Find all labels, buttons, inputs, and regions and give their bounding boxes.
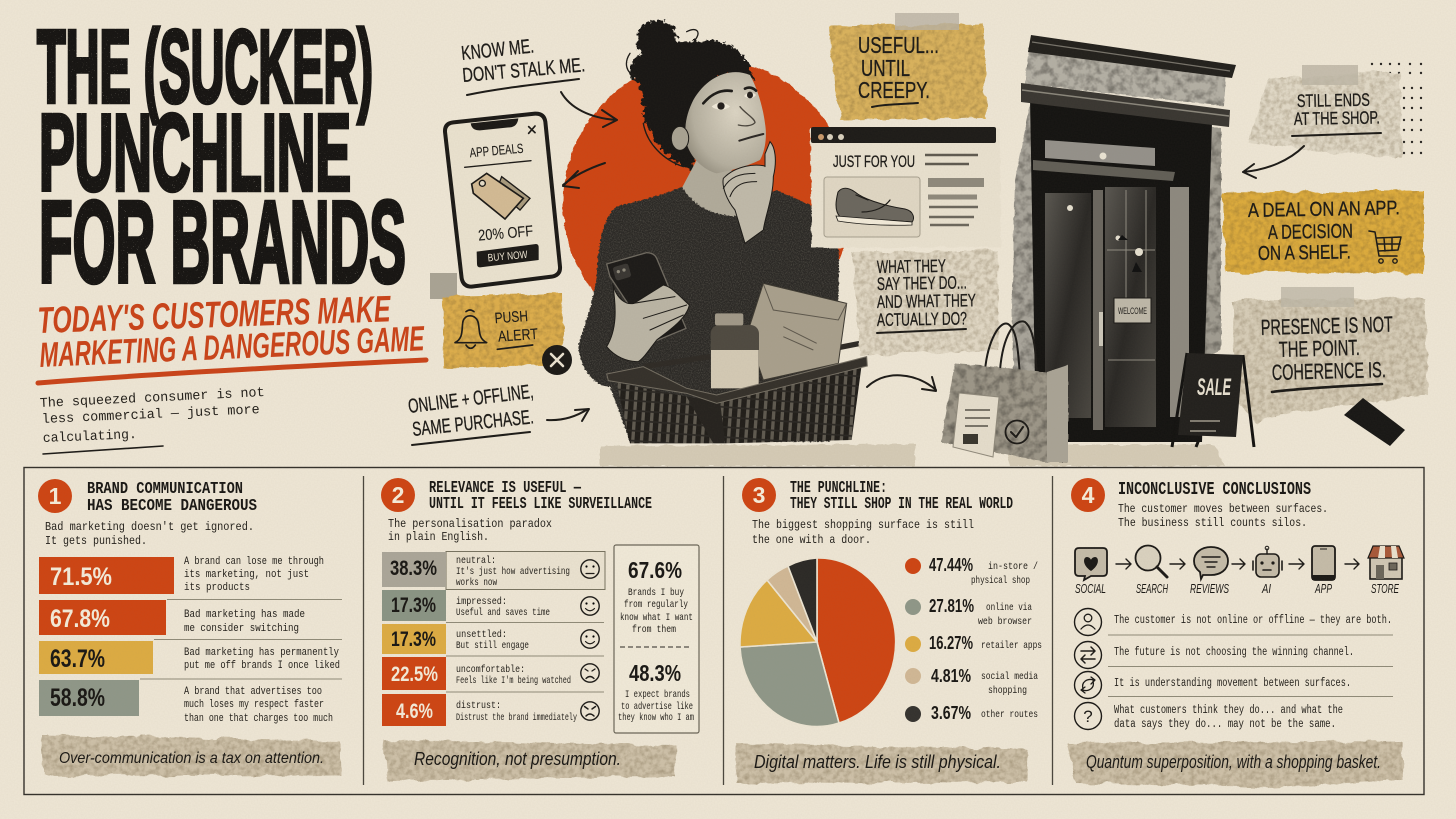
panel 3: the punchline xyxy=(735,478,1042,783)
legend retailer apps xyxy=(905,633,1042,653)
arrow to store xyxy=(1243,146,1304,178)
statement: movement xyxy=(1074,672,1351,698)
note: useful until creepy xyxy=(830,13,986,120)
browser window just for you: JUST FOR YOU xyxy=(833,152,915,171)
note: a deal on an app: A DEAL ON AN APP. xyxy=(1248,197,1400,222)
heading 2 xyxy=(429,479,652,514)
legend other: 3.67% xyxy=(931,703,971,723)
bar 63.7: 63.7% xyxy=(50,645,105,673)
icon: ai robot: AI xyxy=(1261,581,1271,596)
row neutral: works now xyxy=(456,577,497,589)
heading 3 xyxy=(790,479,1013,514)
badge 3 xyxy=(742,478,776,512)
intro 3: the one with a door. xyxy=(752,533,871,547)
statement: future: The future is not choosing the winning channel. xyxy=(1114,646,1354,659)
icon: store xyxy=(1368,546,1404,596)
note: useful until creepy: UNTIL xyxy=(861,55,910,81)
text: FOR BRANDS xyxy=(39,177,406,307)
row unsettled: unsettled: xyxy=(456,629,507,641)
note: online + offline xyxy=(407,381,535,445)
statement: online or offline xyxy=(1074,608,1392,636)
intro 2 xyxy=(388,517,552,544)
statement: what customers think: ? xyxy=(1083,707,1093,726)
row neutral: It's just how advertising xyxy=(456,566,570,578)
stat box: from them xyxy=(632,624,676,636)
legend retailer apps: 16.27% xyxy=(929,633,973,653)
note: push alert: ALERT xyxy=(497,326,539,346)
legend social: 4.81% xyxy=(931,666,971,686)
subtitle: TODAY'S CUSTOMERS MAKE xyxy=(37,288,392,341)
subtitle: MARKETING A DANGEROUS GAME xyxy=(39,319,426,375)
arrow to bag xyxy=(867,375,936,391)
intro text: calculating. xyxy=(43,428,137,447)
arrow xyxy=(1289,559,1304,569)
stat box: from regularly xyxy=(624,599,688,611)
icon: reviews xyxy=(1190,547,1229,596)
row distrust: Distrust the brand immediately xyxy=(456,712,577,724)
icon: social xyxy=(1075,548,1107,596)
badge 4: 4 xyxy=(1082,482,1095,508)
sale sign: SALE xyxy=(1197,374,1232,401)
note: what they say: WHAT THEY xyxy=(877,256,946,277)
note: a deal on an app: ON A SHELF. xyxy=(1258,241,1351,265)
intro 3: The biggest shopping surface is still xyxy=(752,518,974,532)
note: online + offline: SAME PURCHASE. xyxy=(411,406,535,441)
row distrust: distrust: xyxy=(456,700,501,712)
note: useful until creepy: USEFUL... xyxy=(858,32,939,58)
legend online xyxy=(905,596,1032,628)
stat box: I expect brands xyxy=(625,689,690,701)
row neutral: 38.3% xyxy=(390,557,437,580)
icon: search: SEARCH xyxy=(1136,581,1168,596)
bar 71.5: A brand can lose me through xyxy=(184,556,324,568)
heading 1: HAS BECOME DANGEROUS xyxy=(87,497,257,516)
row uncomfortable: uncomfortable: xyxy=(456,664,525,676)
shopping bag xyxy=(941,321,1068,462)
bar 58.8: 58.8% xyxy=(50,684,105,712)
legend in-store: in-store / xyxy=(988,561,1038,573)
row uncomfortable: 22.5% xyxy=(391,663,438,686)
intro 1: It gets punished. xyxy=(45,534,147,548)
intro 1: Bad marketing doesn't get ignored. xyxy=(45,520,254,534)
strip 3: Digital matters. Life is still physical. xyxy=(754,752,1001,772)
intro text xyxy=(40,386,265,454)
note: a deal on an app: A DECISION xyxy=(1268,221,1353,244)
strip 3 xyxy=(735,744,1028,783)
panel 4: inconclusive conclusions xyxy=(1067,478,1404,787)
arrow xyxy=(1170,559,1185,569)
icon: app phone xyxy=(1312,546,1335,596)
icon: social: SOCIAL xyxy=(1075,581,1106,596)
bar 58.8 xyxy=(39,680,333,725)
row distrust xyxy=(382,694,599,726)
bar 63.7: Bad marketing has permanently xyxy=(184,647,339,659)
icon: reviews: REVIEWS xyxy=(1190,581,1229,596)
statement: movement: It is understanding movement between surfaces. xyxy=(1114,677,1351,690)
statement: what customers think xyxy=(1074,702,1343,731)
intro text: The squeezed consumer is not xyxy=(40,386,265,412)
note: a deal on an app xyxy=(1222,190,1424,274)
heading 2: UNTIL IT FEELS LIKE SURVEILLANCE xyxy=(429,495,652,514)
strip 2 xyxy=(384,740,676,781)
badge 2: 2 xyxy=(392,482,404,508)
intro text: less commercial — just more xyxy=(42,403,260,428)
heading 1 xyxy=(87,480,257,516)
dismiss button xyxy=(542,345,572,375)
storefront xyxy=(1005,35,1236,466)
storefront: WELCOME xyxy=(1118,306,1147,316)
phone app deals xyxy=(445,114,560,287)
legend in-store xyxy=(905,555,1038,587)
heading 4: INCONCLUSIVE CONCLUSIONS xyxy=(1118,480,1311,500)
arrow to basket xyxy=(547,409,589,421)
bar 58.8: than one that charges too much xyxy=(184,713,333,725)
icon: store: STORE xyxy=(1371,581,1399,596)
arrow xyxy=(1345,559,1359,569)
strip 2: Recognition, not presumption. xyxy=(414,749,621,769)
legend other xyxy=(905,703,1038,723)
badge 2 xyxy=(381,478,415,512)
legend online: 27.81% xyxy=(929,596,974,616)
intro 3 xyxy=(752,518,974,547)
row neutral: neutral: xyxy=(456,555,496,567)
note: presence is not the point: THE POINT. xyxy=(1278,335,1360,362)
legend social: social media xyxy=(981,671,1038,683)
halftone dots xyxy=(1371,63,1422,154)
intro 4 xyxy=(1118,502,1328,530)
note: what they say: AND WHAT THEY xyxy=(877,290,976,312)
text: THE (SUCKER) xyxy=(37,9,373,124)
note: online + offline: ONLINE + OFFLINE, xyxy=(407,381,535,418)
black tape xyxy=(1344,398,1405,446)
note: push alert xyxy=(443,293,563,368)
intro 2: The personalisation paradox xyxy=(388,517,552,531)
stat box: Brands I buy xyxy=(628,587,684,599)
note: know me xyxy=(460,35,586,95)
row impressed: impressed: xyxy=(456,596,507,608)
icon: search xyxy=(1136,546,1168,596)
panel 2: relevance xyxy=(381,478,699,781)
note: still ends at the shop: AT THE SHOP. xyxy=(1294,108,1380,129)
note: useful until creepy: CREEPY. xyxy=(858,77,930,103)
subtitle xyxy=(37,288,426,383)
intro 4: The customer moves between surfaces. xyxy=(1118,502,1328,516)
tape xyxy=(430,273,457,299)
row impressed: 17.3% xyxy=(391,594,436,617)
bar 71.5: 71.5% xyxy=(50,563,112,591)
statement: what customers think: data says they do... may not be the same. xyxy=(1114,718,1336,731)
stat box: 67.6% xyxy=(628,557,682,583)
row distrust: 4.6% xyxy=(396,700,433,723)
bar 67.8 xyxy=(39,600,305,635)
row unsettled xyxy=(382,624,599,654)
torn paper under basket xyxy=(600,444,915,466)
orange circle xyxy=(563,59,851,347)
heading 2: RELEVANCE IS USEFUL — xyxy=(429,479,582,498)
heading 1: BRAND COMMUNICATION xyxy=(87,480,243,499)
badge 1: 1 xyxy=(49,483,62,509)
heading 3: THE PUNCHLINE: xyxy=(790,479,887,498)
row uncomfortable xyxy=(382,657,599,690)
arrow to woman xyxy=(561,92,617,127)
bar 67.8: 67.8% xyxy=(50,605,110,633)
statement: what customers think: What customers think they do... and what the xyxy=(1114,704,1343,717)
row impressed xyxy=(382,590,599,621)
legend retailer apps: retailer apps xyxy=(981,640,1042,652)
note: know me: DON'T STALK ME. xyxy=(462,54,586,87)
pie chart xyxy=(740,558,896,727)
icon: app phone: APP xyxy=(1314,581,1332,596)
stat box: to advertise like xyxy=(621,701,693,713)
intro 1 xyxy=(45,520,254,548)
legend in-store: 47.44% xyxy=(929,555,973,575)
strip 1 xyxy=(41,735,341,776)
icon: ai robot xyxy=(1253,546,1282,596)
note: what they say xyxy=(852,250,999,356)
bar 58.8: much loses my respect faster xyxy=(184,699,324,711)
note: presence is not the point: COHERENCE IS. xyxy=(1271,357,1386,385)
row impressed: Useful and saves time xyxy=(456,607,550,619)
phone app deals: BUY NOW xyxy=(487,249,529,264)
intro 2: in plain English. xyxy=(388,530,489,544)
arrow to phone xyxy=(563,163,605,188)
note: push alert: PUSH xyxy=(494,308,529,327)
note: presence is not the point xyxy=(1232,287,1428,422)
stat box: they know who I am xyxy=(618,712,694,724)
arrow xyxy=(1116,559,1131,569)
woman with phone and basket xyxy=(578,20,870,443)
note: still ends at the shop xyxy=(1248,65,1402,158)
bar 67.8: me consider switching xyxy=(184,623,299,635)
phone app deals: APP DEALS xyxy=(469,141,524,160)
strip 4 xyxy=(1067,741,1403,787)
stat box: know what I want xyxy=(620,612,693,624)
arrow xyxy=(1232,559,1245,569)
bar 71.5: its marketing, not just xyxy=(184,569,309,581)
phone app deals: 20% OFF xyxy=(478,223,534,245)
browser window just for you xyxy=(810,127,1001,248)
row unsettled: 17.3% xyxy=(391,628,436,651)
row neutral xyxy=(382,552,599,589)
bar 63.7: put me off brands I once liked xyxy=(184,660,340,672)
badge 3: 3 xyxy=(753,482,765,508)
note: still ends at the shop: STILL ENDS xyxy=(1297,90,1370,111)
row uncomfortable: Feels like I'm being watched xyxy=(456,675,571,687)
stat box xyxy=(614,545,699,733)
intro 4: The business still counts silos. xyxy=(1118,516,1307,530)
legend other: other routes xyxy=(981,709,1038,721)
strip 1: Over-communication is a tax on attention. xyxy=(59,750,324,767)
badge 4 xyxy=(1071,478,1105,512)
sale sign xyxy=(1172,353,1254,447)
legend online: web browser xyxy=(978,616,1032,628)
bar 63.7 xyxy=(39,641,340,674)
badge 1 xyxy=(38,479,72,513)
bar 71.5 xyxy=(39,556,324,594)
legend in-store: physical shop xyxy=(971,575,1030,587)
legend online: online via xyxy=(986,602,1032,614)
heading 3: THEY STILL SHOP IN THE REAL WORLD xyxy=(790,495,1013,514)
note: presence is not the point: PRESENCE IS NOT xyxy=(1260,312,1393,340)
note: what they say: SAY THEY DO... xyxy=(877,272,967,294)
note: know me: KNOW ME. xyxy=(460,35,535,65)
infographic panels frame xyxy=(24,468,1424,794)
panel 1: brand communication xyxy=(38,479,342,776)
title: PUNCHLINE xyxy=(39,92,351,214)
stat box: 48.3% xyxy=(629,660,681,686)
bar 71.5: its products xyxy=(184,582,250,594)
legend social xyxy=(905,666,1038,697)
bar 58.8: A brand that advertises too xyxy=(184,686,322,698)
row unsettled: But still engage xyxy=(456,640,529,652)
bar 67.8: Bad marketing has made xyxy=(184,609,305,621)
note: what they say: ACTUALLY DO? xyxy=(877,308,967,330)
legend social: shopping xyxy=(988,685,1027,697)
title xyxy=(37,9,406,307)
statement: future xyxy=(1074,642,1354,668)
